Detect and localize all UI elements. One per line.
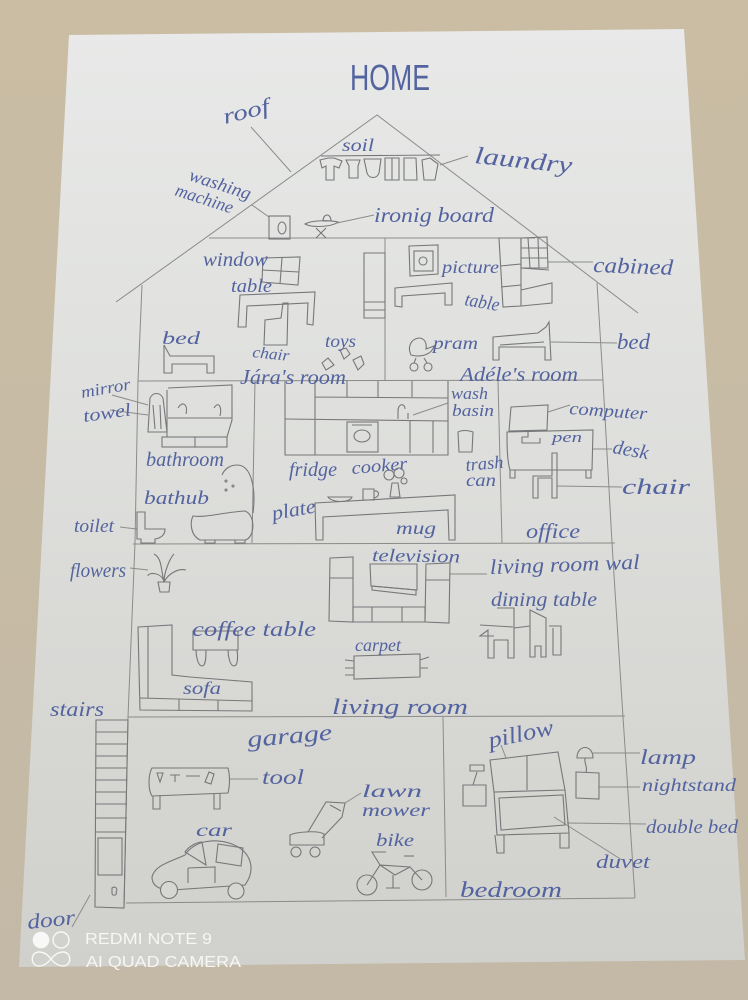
handwritten labels: machine [173, 180, 236, 217]
attic: laundry line and clothes [320, 155, 440, 180]
camera watermark [32, 931, 241, 971]
handwritten labels: mug [396, 518, 436, 538]
handwritten labels: carpet [355, 635, 402, 655]
handwritten labels: chair [622, 474, 691, 499]
handwritten labels: toilet [74, 516, 115, 537]
handwritten labels: duvet [596, 852, 651, 873]
bedroom: double bed, nightstands, lamps [463, 748, 599, 853]
handwritten labels: window [203, 249, 269, 271]
camera watermark: REDMI NOTE 9 [85, 931, 212, 948]
handwritten labels: pram [431, 333, 478, 353]
leader lines [72, 127, 646, 927]
handwritten labels: bed [617, 329, 651, 354]
handwritten labels: toys [325, 331, 356, 351]
icon: ironing board [305, 215, 338, 238]
handwritten labels: television [372, 545, 460, 567]
office: computer, desk, chair [507, 405, 593, 498]
handwritten labels: bathub [144, 488, 209, 509]
handwritten labels: nightstand [642, 775, 737, 795]
handwritten labels: picture [440, 257, 499, 277]
handwritten labels: door [26, 905, 77, 934]
handwritten labels: lawn [362, 781, 422, 801]
upper left room furniture: window, table, chair, cabinet, bed, toys [164, 253, 385, 373]
handwritten labels: roof [220, 92, 275, 129]
camera watermark: AI QUAD CAMERA [86, 954, 241, 971]
handwritten labels: bathroom [146, 449, 224, 471]
house structure [116, 115, 638, 908]
title: HOME [350, 57, 430, 98]
kitchen: cupboards, stove, sink, trash can, table with plate, mug and flowers [285, 380, 473, 540]
handwritten labels: pen [551, 430, 582, 446]
handwritten labels: towel [82, 399, 132, 426]
bathroom: towel, sink counter, tub, shower, toilet [137, 385, 254, 543]
handwritten labels: basin [452, 401, 494, 420]
handwritten labels: dining table [491, 589, 597, 611]
handwritten labels: wash [451, 384, 488, 403]
handwritten labels: bike [376, 830, 414, 850]
handwritten labels: ironig board [374, 203, 495, 227]
handwritten labels: plate [268, 496, 317, 525]
handwritten labels: lamp [640, 745, 696, 769]
garage: tool bench, car, mower, bike [149, 768, 432, 899]
handwritten labels: chair [252, 344, 291, 365]
handwritten labels: stairs [50, 697, 104, 721]
handwritten labels: flowers [70, 560, 126, 582]
handwritten labels: table [463, 289, 501, 316]
handwritten labels: mower [362, 800, 431, 820]
handwritten labels: soil [342, 135, 374, 155]
handwritten labels: pillow [484, 715, 556, 753]
handwritten labels: car [196, 820, 233, 840]
living room: plant, TV wall, dining set, carpet, coffee table, sofa [138, 554, 561, 711]
handwritten labels: laundry [473, 143, 574, 179]
handwritten labels: mirror [79, 374, 132, 402]
handwritten labels: washing [187, 165, 254, 204]
handwritten labels: table [231, 276, 272, 297]
handwritten labels: Jára's room [240, 365, 346, 389]
handwritten labels: fridge [289, 459, 337, 481]
handwritten labels: office [526, 519, 580, 543]
handwritten labels: sofa [183, 678, 221, 698]
icon: washing machine [269, 216, 290, 239]
handwritten labels: trash [465, 452, 504, 475]
handwritten labels: Adéle's room [458, 364, 578, 386]
handwritten labels: can [466, 470, 496, 490]
handwritten labels: living room wal [489, 550, 640, 579]
handwritten labels: living room [332, 694, 468, 719]
handwritten labels: bed [162, 328, 201, 348]
handwritten labels: bedroom [460, 877, 562, 902]
handwritten labels: cabined [593, 252, 675, 280]
upper right room furniture: picture, table, cabinets, pram, bed [395, 237, 552, 371]
handwritten labels: tool [262, 765, 304, 789]
handwritten labels: double bed [646, 817, 739, 838]
handwritten labels: computer [569, 398, 649, 424]
handwritten labels: desk [611, 436, 652, 464]
handwritten labels: cooker [351, 453, 409, 478]
handwritten labels: garage [246, 720, 333, 752]
handwritten labels: coffee table [192, 617, 316, 641]
stairs and door [95, 720, 128, 908]
